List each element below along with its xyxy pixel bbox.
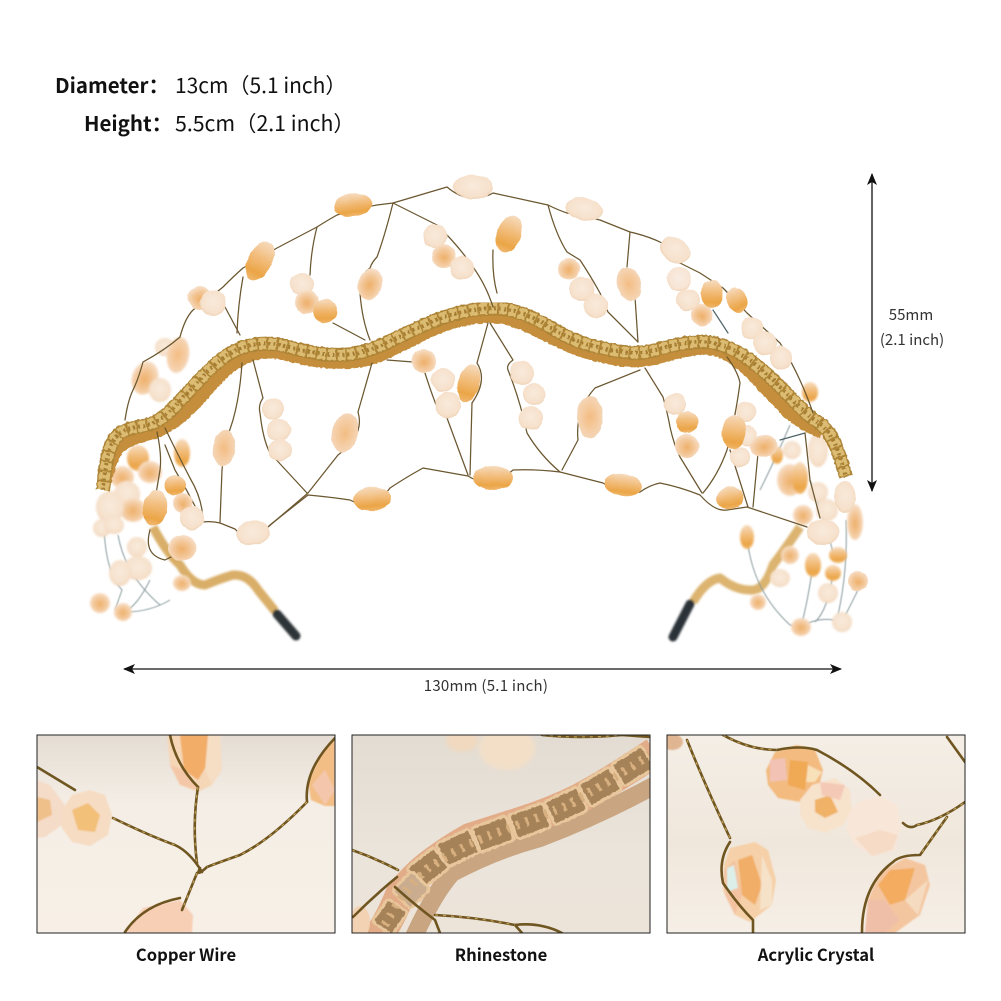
in-focus crystal beads bbox=[140, 175, 868, 591]
height dimension arrow bbox=[871, 174, 873, 491]
wrapped band with stones bbox=[372, 745, 655, 950]
caption: copper wire: Copper Wire bbox=[136, 942, 236, 966]
blurred beads behind band bbox=[446, 736, 534, 770]
width dimension arrow bbox=[124, 668, 841, 670]
blurred side beads right bbox=[740, 382, 863, 636]
crystal beads bbox=[661, 734, 930, 933]
copper wire frame bbox=[125, 187, 820, 560]
height dimension label: 55mm bbox=[889, 304, 933, 325]
beads in copper wire panel bbox=[37, 735, 335, 933]
rhinestone wavy band bbox=[103, 308, 846, 490]
panel: rhinestone detail bbox=[352, 734, 650, 934]
wires around band bbox=[352, 735, 650, 933]
blurred rear band ends and tips bbox=[153, 527, 800, 637]
panel: acrylic crystal detail bbox=[661, 734, 965, 933]
lower wire arc bbox=[203, 468, 807, 537]
panel: copper wire detail bbox=[37, 735, 335, 933]
stone sparkle bbox=[385, 755, 650, 925]
headband illustration bbox=[90, 175, 868, 637]
caption: rhinestone: Rhinestone bbox=[455, 942, 547, 966]
twisted wires bbox=[37, 735, 335, 932]
diameter line: Diameter： bbox=[55, 69, 169, 99]
caption: acrylic crystal: Acrylic Crystal bbox=[757, 942, 874, 966]
height line: 5.5cm（2.1 inch） bbox=[175, 107, 355, 138]
bottom-left bead bbox=[352, 906, 370, 932]
height dimension label: (2.1 inch) bbox=[880, 329, 944, 350]
height dimension label bbox=[880, 304, 944, 350]
width dimension label: 130mm (5.1 inch) bbox=[424, 675, 548, 696]
blurred side beads left bbox=[90, 335, 192, 621]
rhinestones bbox=[372, 745, 655, 935]
size specification text bbox=[55, 69, 355, 138]
height line: Height： bbox=[84, 107, 172, 137]
diameter line: 13cm（5.1 inch） bbox=[175, 70, 346, 100]
wires bbox=[687, 735, 965, 933]
blurred side wires bbox=[104, 425, 858, 627]
upper wire arc bbox=[125, 187, 813, 420]
spoke wires bbox=[359, 203, 393, 340]
